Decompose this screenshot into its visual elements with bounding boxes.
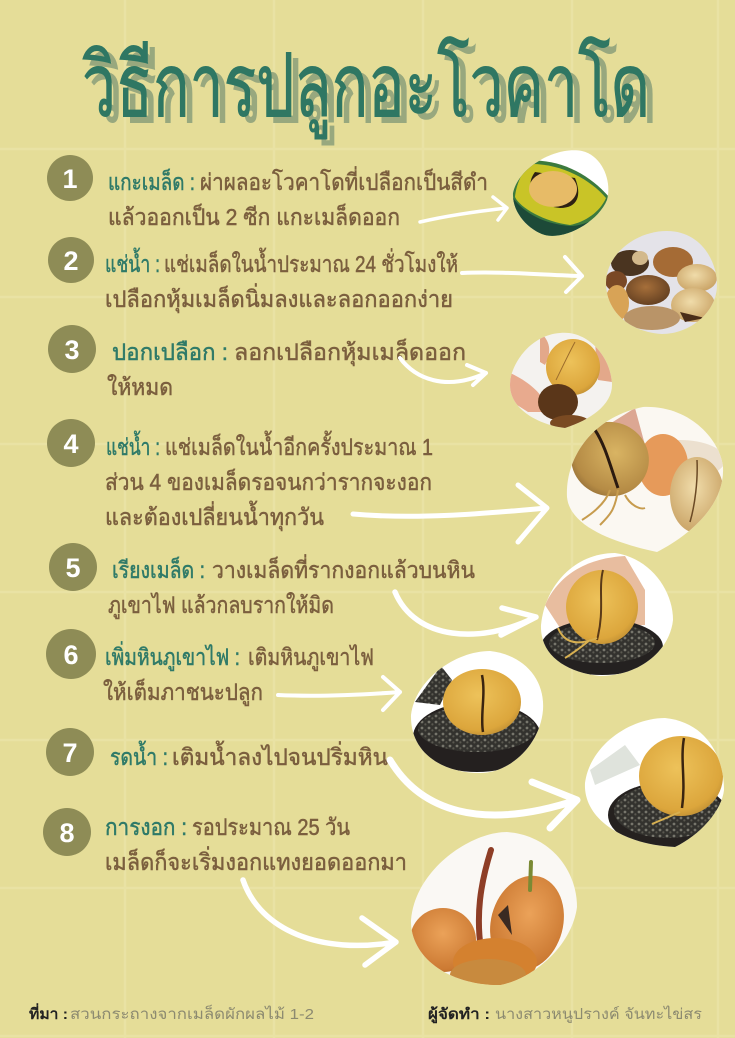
arrow 3 (400, 358, 486, 385)
arrow 8 (243, 880, 396, 965)
step 4 text: แช่น้ำ : (106, 431, 160, 460)
photo 5: seed on volcanic rock with roots (541, 553, 673, 676)
step 1 text: แล้วออกเป็น 2 ซีก แกะเมล็ดออก (108, 202, 400, 230)
number badge 3: 3 (64, 335, 80, 365)
number badge 4 (47, 419, 95, 467)
step 7 text (110, 741, 388, 770)
arrow 7 (390, 760, 577, 828)
number badge 6: 6 (63, 640, 79, 670)
number badge 1 (47, 155, 93, 201)
step 4 text: และต้องเปลี่ยนน้ำทุกวัน (105, 501, 324, 531)
photo 1: halved avocado (512, 150, 608, 236)
step 7 text: เติมน้ำลงไปจนปริ่มหิน (172, 741, 388, 770)
photo 8: sprouted seeds (405, 830, 580, 991)
step 3 text: ลอกเปลือกหุ้มเมล็ดออก (234, 337, 466, 366)
step 1 text (108, 166, 488, 230)
step 2 text: แช่น้ำ : (105, 248, 160, 277)
step 8 text: เมล็ดก็จะเริ่มงอกแทงยอดออกมา (105, 846, 407, 875)
step 5 (49, 543, 475, 619)
step 7 text: รดน้ำ : (110, 741, 168, 770)
step 2 (48, 237, 458, 313)
step 1 (47, 155, 488, 230)
step 3 text: ให้หมด (107, 374, 173, 400)
step 4 text: ส่วน 4 ของเมล็ดรอจนกว่ารากจะงอก (105, 467, 432, 495)
step 2 text (105, 248, 458, 313)
step 5 text (108, 554, 475, 619)
step 5 text: เรียงเมล็ด : (112, 555, 205, 583)
source credit: สวนกระถางจากเมล็ดผักผลไม้ 1-2 (70, 1004, 314, 1023)
number badge 1: 1 (62, 164, 78, 194)
number badge 2: 2 (63, 246, 79, 276)
arrow 1 (420, 197, 507, 222)
number badge 7 (46, 728, 94, 776)
author credit: ผู้จัดทำ : (428, 1006, 490, 1024)
step 5 text: ภูเขาไฟ แล้วกลบรากให้มิด (108, 592, 334, 619)
step 8 text: รอประมาณ 25 วัน (192, 814, 350, 840)
arrow 2 (462, 257, 582, 292)
photo 6: seed covered with rock (411, 651, 544, 773)
step 5 text: วางเมล็ดที่รากงอกแล้วบนหิน (212, 554, 475, 583)
step 1 text: ผ่าผลอะโวคาโดที่เปลือกเป็นสีดำ (200, 166, 488, 195)
arrow 4 (353, 485, 547, 542)
step 8 (43, 808, 407, 875)
step 6 (46, 629, 374, 706)
number badge 2 (48, 237, 94, 283)
source credit (29, 1003, 314, 1023)
step 3 (48, 325, 466, 400)
step 2 text: เปลือกหุ้มเมล็ดนิ่มลงและลอกออกง่าย (105, 283, 453, 313)
number badge 7: 7 (62, 738, 78, 768)
photo 3: peeling seed by hand (510, 332, 612, 428)
number badge 8 (43, 808, 91, 856)
step 8 text: การงอก : (105, 814, 187, 840)
step 6 text: เพิ่มหินภูเขาไฟ : (105, 641, 240, 671)
step 2 text: แช่เมล็ดในน้ำประมาณ 24 ชั่วโมงให้ (164, 248, 458, 277)
step 8 text (105, 814, 407, 875)
number badge 8: 8 (59, 818, 75, 848)
step 3 text (107, 337, 466, 400)
step 4 text: แช่เมล็ดในน้ำอีกครั้งประมาณ 1 (165, 431, 433, 460)
step 1 text: แกะเมล็ด : (108, 167, 195, 195)
step 4 (47, 419, 433, 531)
step 6 text (103, 641, 374, 706)
step 6 text: เติมหินภูเขาไฟ (248, 644, 374, 671)
step 4 text (105, 431, 433, 531)
photo 2: soaked seeds in bowl (606, 231, 717, 334)
arrow 5 (395, 592, 536, 635)
number badge 5: 5 (65, 553, 81, 583)
number badge 4: 4 (63, 429, 79, 459)
number badge 3 (48, 325, 96, 373)
number badge 5 (49, 543, 97, 591)
photo 4: seeds with roots (560, 402, 725, 554)
step 7 (46, 728, 388, 776)
author credit (428, 1005, 702, 1024)
step 6 text: ให้เต็มภาชนะปลูก (103, 677, 263, 706)
photo 7: watered seed in dish (580, 715, 728, 849)
step 3 text: ปอกเปลือก : (112, 339, 228, 365)
arrow 6 (278, 677, 400, 710)
author credit: นางสาวหนูปรางค์ จันทะไข่สร (495, 1005, 702, 1023)
source credit: ที่มา : (29, 1003, 68, 1023)
number badge 6 (46, 629, 96, 679)
